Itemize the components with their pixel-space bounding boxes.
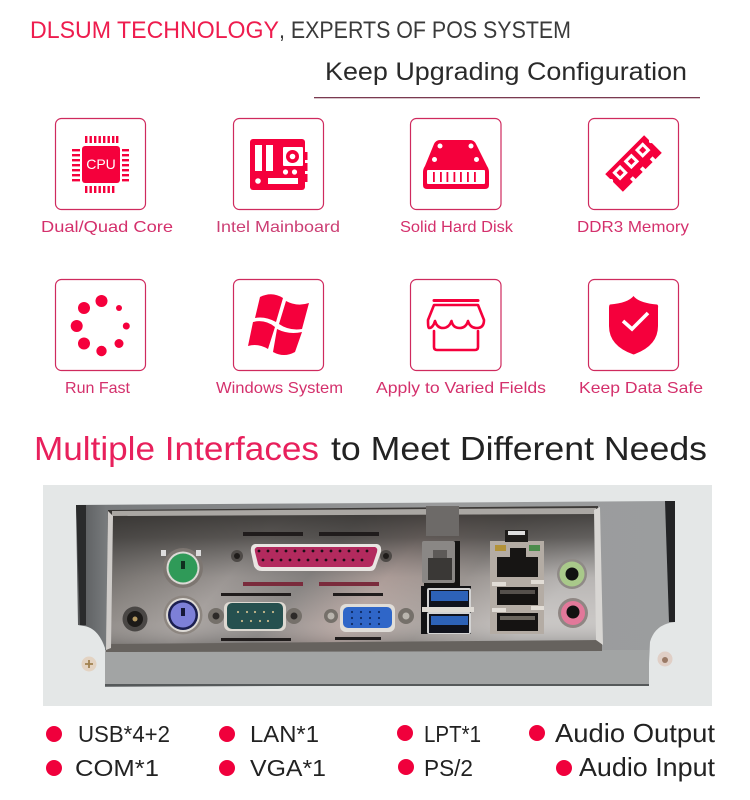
- panel: Run Fast: [56, 280, 146, 397]
- item: LPT: [397, 721, 481, 747]
- I/O shield plate: [106, 506, 602, 649]
- item: Audio Input: Audio Input: [579, 752, 716, 782]
- item: PS/2: PS/2: [424, 755, 473, 781]
- label: Apply to Varied Fields: [376, 380, 546, 397]
- label: Windows System: [216, 380, 343, 397]
- item: COM: COM*1: [75, 755, 159, 781]
- item: Audio Output: Audio Output: [555, 718, 716, 748]
- port: power jack: [122, 606, 148, 632]
- panel: Windows System: [216, 280, 343, 397]
- port: audio input: [558, 598, 588, 628]
- port: USB 3: [421, 586, 474, 634]
- icon: shield: [609, 296, 658, 354]
- port: VGA: [324, 604, 414, 632]
- port: COM: [208, 602, 302, 631]
- title: , EXPERTS OF POS SYSTEM: [279, 17, 571, 44]
- label: Intel Mainboard: [216, 219, 340, 236]
- icon: windows flag: [248, 294, 309, 355]
- icon: storefront: [428, 300, 484, 350]
- icon: mainboard: [250, 139, 308, 190]
- icon: loading dots: [71, 295, 130, 356]
- port: slots: [221, 532, 383, 641]
- title: [30, 17, 571, 44]
- item: VGA: VGA*1: [250, 755, 326, 781]
- chassis screws: [82, 652, 672, 672]
- heading: [34, 430, 707, 467]
- icon: hard disk: [423, 140, 489, 189]
- photo: rear I/O ports: [43, 485, 712, 706]
- panel: Keep Data Safe: [579, 280, 703, 397]
- item: COM: [46, 755, 159, 781]
- item: LAN: [219, 721, 319, 747]
- item: PS/2: [398, 755, 473, 781]
- panel: Dual/Quad Core: [41, 118, 173, 236]
- item: VGA: [219, 755, 326, 781]
- label: Dual/Quad Core: [41, 219, 173, 236]
- item: LPT: LPT*1: [424, 721, 481, 747]
- icon: CPU: CPU: [86, 156, 116, 172]
- heading: to Meet Different Needs: [331, 430, 707, 467]
- label: Keep Data Safe: [579, 380, 703, 397]
- port: LPT: [231, 544, 392, 571]
- item: LAN: LAN*1: [250, 721, 319, 747]
- label: Run Fast: [65, 380, 131, 397]
- port: LAN and USB 2: [490, 530, 544, 634]
- port: RJ11: [422, 541, 460, 586]
- title: DLSUM TECHNOLOGY: [30, 17, 279, 44]
- panel: Intel Mainboard: [216, 118, 340, 236]
- icon: RAM module: [605, 135, 662, 192]
- port: PS/2 purple: [164, 596, 202, 634]
- panel: DDR3 Memory: [577, 118, 689, 236]
- subtitle: Keep Upgrading Configuration: [325, 58, 687, 86]
- panel: Solid Hard Disk: [400, 118, 514, 236]
- label: Solid Hard Disk: [400, 219, 514, 236]
- legend: interface list: [46, 718, 716, 782]
- port: PS/2 green: [161, 548, 203, 588]
- port: audio output: [557, 559, 587, 589]
- item: USB: USB*4+2: [78, 721, 170, 747]
- metal chassis: [76, 501, 675, 687]
- label: DDR3 Memory: [577, 219, 689, 236]
- heading: Multiple Interfaces: [34, 430, 319, 467]
- panel: Apply to Varied Fields: [376, 280, 546, 397]
